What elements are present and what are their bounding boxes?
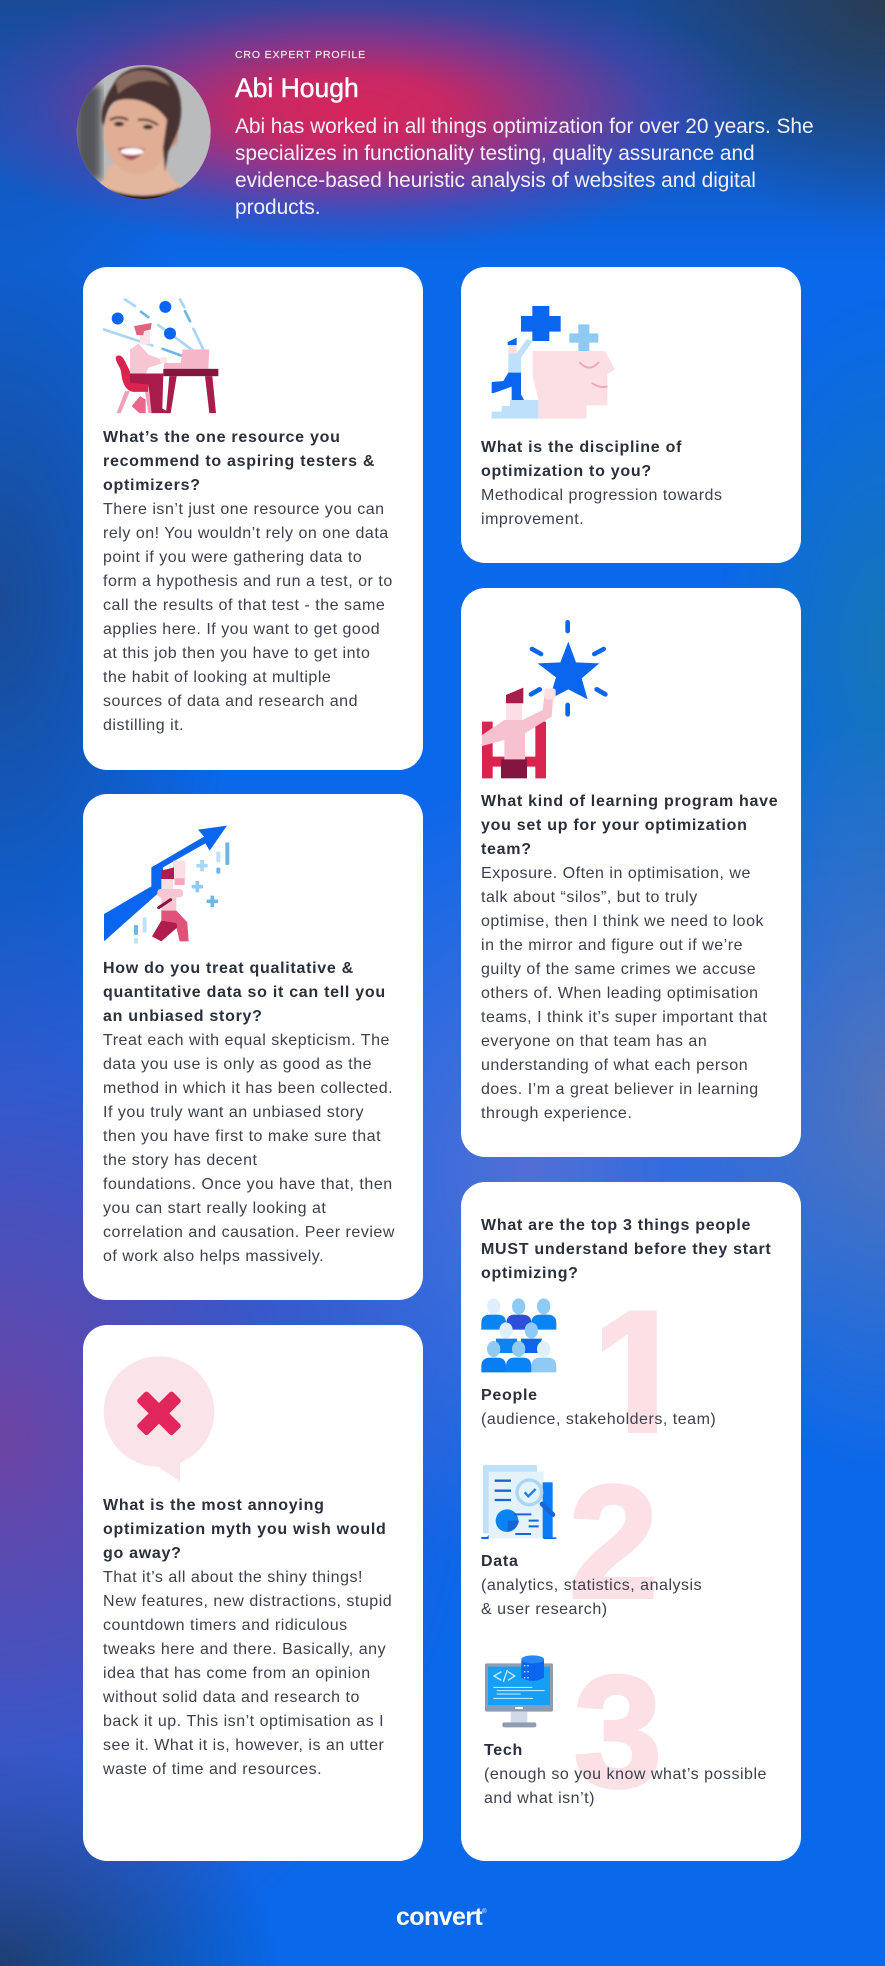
question and answer text: What’s the one resource you bbox=[103, 429, 341, 446]
question and answer text: recommend to aspiring testers & bbox=[103, 453, 375, 470]
item: data: Data bbox=[481, 1553, 519, 1570]
question and answer text: the habit of looking at multiple bbox=[103, 669, 331, 686]
icon: person reaching for star bbox=[482, 620, 608, 778]
heading question bbox=[481, 1217, 771, 1282]
number 1: 1 bbox=[589, 1278, 685, 1470]
question and answer text: without solid data and research to bbox=[103, 1689, 360, 1706]
item: tech bbox=[484, 1742, 767, 1807]
panel: learning program bbox=[461, 588, 801, 1157]
question and answer text: method in which it has been collected. bbox=[103, 1080, 393, 1097]
item: people: People bbox=[481, 1387, 538, 1404]
heading question: optimizing? bbox=[481, 1265, 579, 1282]
item: data: & user research) bbox=[481, 1601, 608, 1618]
question and answer text: through experience. bbox=[481, 1105, 632, 1122]
question and answer text: There isn’t just one resource you can bbox=[103, 501, 385, 518]
expert name: Abi Hough bbox=[235, 73, 359, 103]
icon: climbing into head with plus signs bbox=[492, 306, 615, 419]
question and answer text: data you use is only as good as the bbox=[103, 1056, 372, 1073]
question and answer text: distilling it. bbox=[103, 717, 184, 734]
question and answer text: the story has decent bbox=[103, 1152, 258, 1169]
heading question: MUST understand before they start bbox=[481, 1241, 771, 1258]
question and answer text: see it. What it is, however, is an utter bbox=[103, 1737, 384, 1754]
question and answer text bbox=[481, 439, 722, 528]
expert bio: evidence-based heuristic analysis of websites and digital bbox=[235, 169, 756, 192]
expert bio bbox=[235, 115, 814, 219]
icon: computer with code and database bbox=[485, 1655, 553, 1728]
icon: person at desk with data bbox=[102, 298, 218, 414]
question and answer text: rely on! You wouldn’t rely on one data bbox=[103, 525, 389, 542]
logo: convert: convert® bbox=[396, 1903, 486, 1931]
icon: group of people bbox=[481, 1298, 556, 1372]
question and answer text: What is the most annoying bbox=[103, 1497, 325, 1514]
question and answer text: optimizers? bbox=[103, 477, 201, 494]
item: data bbox=[481, 1553, 702, 1618]
question and answer text: optimization to you? bbox=[481, 463, 652, 480]
question and answer text: others of. When leading optimisation bbox=[481, 985, 759, 1002]
expert bio: products. bbox=[235, 196, 320, 219]
panel: one resource bbox=[83, 267, 423, 770]
question and answer text: If you truly want an unbiased story bbox=[103, 1104, 364, 1121]
question and answer text: quantitative data so it can tell you bbox=[103, 984, 386, 1001]
panel: top 3 things bbox=[461, 1182, 801, 1861]
question and answer text: optimization myth you wish would bbox=[103, 1521, 386, 1538]
header: expert profile bbox=[76, 49, 814, 219]
portrait photo bbox=[76, 65, 211, 199]
expert bio: specializes in functionality testing, quality assurance and bbox=[235, 142, 755, 165]
question and answer text: back it up. This isn’t optimisation as I bbox=[103, 1713, 384, 1730]
panel: qualitative and quantitative data bbox=[83, 794, 423, 1300]
question and answer text: optimise, then I think we need to look bbox=[481, 913, 764, 930]
eyebrow label: CRO EXPERT PROFILE bbox=[235, 49, 366, 61]
question and answer text: sources of data and research and bbox=[103, 693, 358, 710]
item: data: (analytics, statistics, analysis bbox=[481, 1577, 702, 1594]
icon: speech bubble with cross bbox=[104, 1356, 214, 1482]
question and answer text: Methodical progression towards bbox=[481, 487, 722, 504]
number 2: 2 bbox=[569, 1452, 658, 1631]
question and answer text: go away? bbox=[103, 1545, 182, 1562]
question and answer text: Exposure. Often in optimisation, we bbox=[481, 865, 751, 882]
question and answer text: does. I’m a great believer in learning bbox=[481, 1081, 759, 1098]
question and answer text: improvement. bbox=[481, 511, 584, 528]
question and answer text: point if you were gathering data to bbox=[103, 549, 362, 566]
icon: person pushing up rising arrow bbox=[104, 826, 230, 944]
question and answer text: That it’s all about the shiny things! bbox=[103, 1569, 363, 1586]
question and answer text: idea that has come from an opinion bbox=[103, 1665, 371, 1682]
question and answer text bbox=[103, 1497, 392, 1778]
question and answer text: countdown timers and ridiculous bbox=[103, 1617, 348, 1634]
question and answer text: tweaks here and there. Basically, any bbox=[103, 1641, 386, 1658]
question and answer text: teams, I think it’s super important that bbox=[481, 1009, 767, 1026]
heading question: What are the top 3 things people bbox=[481, 1217, 751, 1234]
question and answer text: foundations. Once you have that, then bbox=[103, 1176, 393, 1193]
question and answer text: in the mirror and figure out if we’re bbox=[481, 937, 743, 954]
question and answer text: of work also helps massively. bbox=[103, 1248, 324, 1265]
question and answer text: an unbiased story? bbox=[103, 1008, 263, 1025]
question and answer text: form a hypothesis and run a test, or to bbox=[103, 573, 393, 590]
question and answer text: everyone on that team has an bbox=[481, 1033, 707, 1050]
question and answer text: you set up for your optimization bbox=[481, 817, 748, 834]
question and answer text: applies here. If you want to get good bbox=[103, 621, 380, 638]
number 3: 3 bbox=[574, 1644, 662, 1820]
item: people bbox=[481, 1387, 716, 1428]
question and answer text: correlation and causation. Peer review bbox=[103, 1224, 395, 1241]
question and answer text: What kind of learning program have bbox=[481, 793, 778, 810]
question and answer text: you can start really looking at bbox=[103, 1200, 326, 1217]
question and answer text: team? bbox=[481, 841, 532, 858]
question and answer text: talk about “silos”, but to truly bbox=[481, 889, 698, 906]
item: tech: (enough so you know what’s possible bbox=[484, 1766, 767, 1783]
question and answer text: Treat each with equal skepticism. The bbox=[103, 1032, 390, 1049]
question and answer text: at this job then you have to get into bbox=[103, 645, 370, 662]
question and answer text: guilty of the same crimes we accuse bbox=[481, 961, 756, 978]
item: tech: and what isn’t) bbox=[484, 1790, 595, 1807]
question and answer text bbox=[103, 429, 393, 734]
question and answer text: waste of time and resources. bbox=[103, 1761, 322, 1778]
question and answer text bbox=[481, 793, 778, 1122]
question and answer text: understanding of what each person bbox=[481, 1057, 748, 1074]
item: people: (audience, stakeholders, team) bbox=[481, 1411, 716, 1428]
panel: annoying myth bbox=[83, 1325, 423, 1861]
icon: data report with magnifier bbox=[481, 1465, 556, 1539]
question and answer text: New features, new distractions, stupid bbox=[103, 1593, 392, 1610]
item: tech: Tech bbox=[484, 1742, 523, 1759]
question and answer text: What is the discipline of bbox=[481, 439, 682, 456]
question and answer text: How do you treat qualitative & bbox=[103, 960, 354, 977]
expert bio: Abi has worked in all things optimization for over 20 years. She bbox=[235, 115, 814, 138]
question and answer text: then you have first to make sure that bbox=[103, 1128, 381, 1145]
question and answer text: call the results of that test - the same bbox=[103, 597, 385, 614]
question and answer text bbox=[103, 960, 395, 1265]
panel: discipline of optimization bbox=[461, 267, 801, 563]
